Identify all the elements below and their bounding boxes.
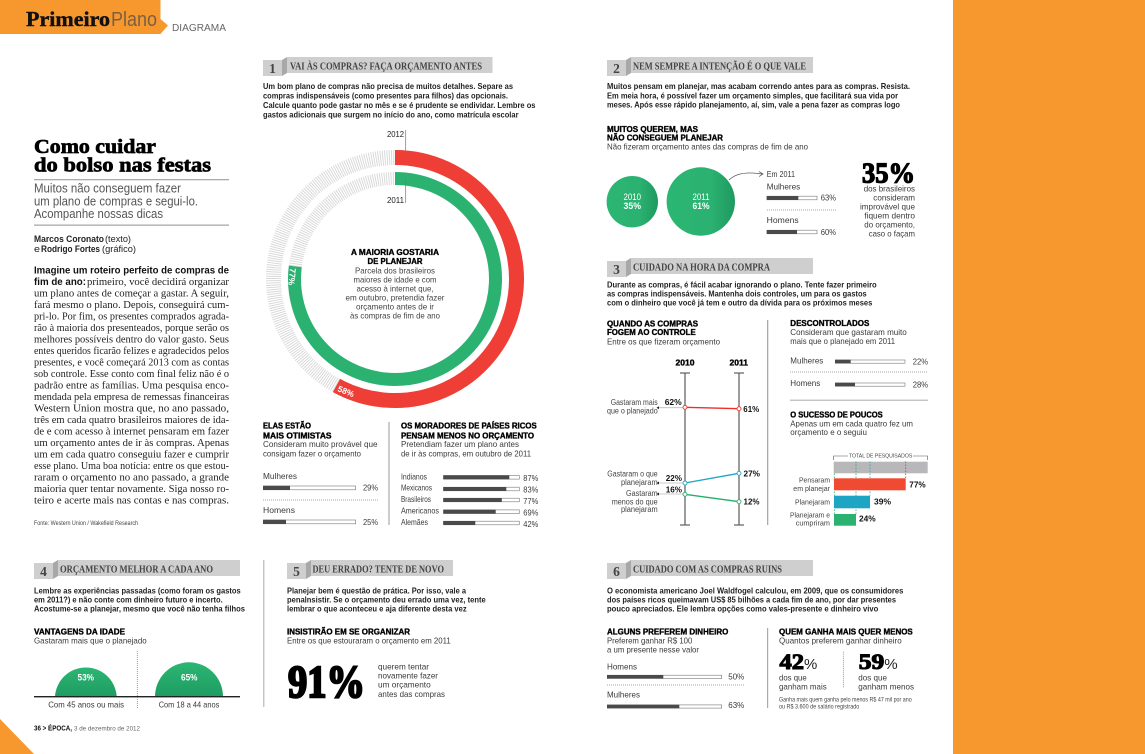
section 3 heading: 3 (613, 262, 620, 277)
chart heading: muitos querem: Não fizeram orçamento antes das compras de fim de ano (607, 141, 808, 151)
panel: descontrolados (790, 319, 928, 390)
body text: primeiro, você decidirá organizar (87, 277, 229, 288)
title: do bolso nas festas (34, 154, 211, 176)
body text (34, 265, 229, 506)
dome 65%: 65% (181, 672, 198, 682)
panel: elas estão mais otimistas: consigam fazer o orçamento (263, 449, 361, 459)
figure 42% (779, 649, 827, 691)
orange side panel (953, 0, 1145, 754)
body text: Imagine um roteiro perfeito de compras de (34, 265, 229, 276)
circle 2010 35% (607, 176, 658, 227)
chart heading: insistirão: Entre os que estouraram o orçamento em 2011 (287, 636, 451, 646)
section 2 text: Em meia hora, é possível fazer um orçamento simples, que facilitará sua vida por (607, 90, 899, 100)
chart heading: quando as compras: Entre os que fizeram orçamento (607, 336, 720, 346)
row labels: planejaram (621, 505, 658, 514)
section 5 heading: DEU ERRADO? TENTE DE NOVO (312, 565, 444, 576)
panel: moradores de países ricos (401, 420, 539, 529)
circle 2010 35%: 35% (624, 201, 641, 211)
body text: fim de ano: (34, 277, 86, 288)
row: mexicanos: Mexicanos (401, 483, 432, 493)
body text: presentes, e você começará 2013 com as contas (34, 357, 229, 368)
row: americanos: 69% (523, 508, 539, 518)
section 3 text: as compras indispensáveis. Mantenha dois controles, um para os gastos (607, 288, 867, 298)
row: indianos: 87% (523, 473, 539, 483)
page header tab (0, 0, 226, 34)
slope chart 2010 to 2011 (607, 359, 760, 525)
bar: planejaram 39% (795, 496, 891, 508)
section 3 heading: CUIDADO NA HORA DA COMPRA (633, 263, 771, 274)
panel: alguns preferem dinheiro (607, 627, 745, 710)
bar: planejaram e cumpriram 24%: Planejaram e (790, 510, 830, 519)
chart heading: vantagens da idade: Gastaram mais que o planejado (34, 636, 147, 646)
label 2011: 2011 (387, 195, 404, 205)
body text: três em cada quatro brasileiros maiores de ida- (34, 415, 229, 426)
panel: elas estão mais otimistas: Mulheres (263, 471, 297, 481)
chart heading: vantagens da idade: VANTAGENS DA IDADE (34, 627, 126, 636)
section 1 text: Um bom plano de compras não precisa de muitos detalhes. Separe as (263, 81, 513, 91)
panel: o sucesso de poucos: O SUCESSO DE POUCOS (790, 410, 883, 419)
section 4 text: Lembre as experiências passadas (como foram os gastos (34, 585, 241, 595)
body text: rão à maioria dos presenteados, porque serão os (34, 323, 229, 334)
figure 59%: 59 (859, 649, 884, 674)
panel: o sucesso de poucos: Apenas um em cada quatro fez um (790, 419, 913, 429)
dome 53% (55, 667, 117, 697)
panel: alguns preferem dinheiro: Mulheres (607, 690, 640, 700)
section 6 text: pouco apreciados. Ele lembra opções como vales-presente e dinheiro vivo (607, 603, 878, 613)
panel: descontrolados: 22% (913, 357, 928, 367)
ring 2011 green arc (295, 178, 496, 379)
bar: planejaram e cumpriram 24%: 24% (859, 514, 876, 524)
panel: moradores de países ricos: Pretendiam fazer um plano antes (401, 439, 519, 449)
section 5 heading (287, 560, 453, 579)
big number 91%: querem tentar (378, 661, 429, 671)
bar: pensaram em planejar 77%: em planejar (793, 484, 830, 493)
subtitle: Muitos não conseguem fazer (34, 180, 182, 196)
figure 59%: dos que (858, 673, 887, 683)
section 2 text (607, 81, 910, 110)
big number 35%: fiquem dentro (864, 210, 915, 220)
big number 91%: 91% (288, 656, 365, 707)
figure 59% (858, 649, 914, 691)
authors (34, 234, 136, 255)
section 2 heading: 2 (613, 61, 620, 76)
authors: (gráfico) (102, 244, 136, 255)
row labels: Gastaram o que (607, 470, 658, 479)
section 4 heading: 4 (40, 564, 47, 579)
authors: (texto) (105, 234, 131, 245)
breakdown 2011 by gender: 60% (821, 227, 836, 237)
panel: descontrolados: Homens (790, 378, 820, 388)
body text: um em cada quatro conseguiu fazer e cumprir (34, 449, 229, 460)
chart heading: insistirão: INSISTIRÃO EM SE ORGANIZAR (287, 626, 410, 636)
section 3 text (607, 279, 877, 307)
rule (34, 224, 229, 226)
row labels: planejaram (621, 478, 658, 487)
big number 91%: antes das compras (378, 689, 445, 699)
section 5 heading: 5 (293, 564, 300, 579)
panel: alguns preferem dinheiro: Homens (607, 661, 637, 671)
section 6 heading: CUIDADO COM AS COMPRAS RUINS (633, 565, 782, 576)
panel: descontrolados: Mulheres (790, 355, 823, 365)
dome 53%: 53% (78, 672, 94, 682)
section 6 heading (607, 560, 813, 579)
panel: alguns preferem dinheiro: Preferem ganhar R$ 100 (607, 636, 693, 646)
big number 35% (860, 158, 915, 238)
bar: pensaram em planejar 77% (793, 475, 926, 493)
section 6 text: dos países ricos queimavam US$ 85 bilhões a cada fim de ano, por dar presentes (607, 594, 896, 604)
panel: moradores de países ricos: PENSAM MENOS NO ORÇAMENTO (401, 431, 535, 440)
ring centre text: orçamento antes de ir (356, 301, 434, 311)
folio (34, 723, 140, 732)
panel: descontrolados: 28% (913, 380, 928, 390)
page header tab: DIAGRAMA (172, 22, 226, 34)
panel: alguns preferem dinheiro: 50% (728, 672, 745, 682)
ring centre text: em outubro, pretendia fazer (346, 292, 445, 302)
section 4 text: em 2011?) e não conte com dinheiro futuro e incerto. (34, 594, 223, 604)
chart heading: quando as compras (607, 320, 720, 346)
section 5 text (287, 585, 486, 613)
panel: elas estão mais otimistas: 25% (363, 517, 378, 527)
title (34, 136, 211, 176)
circle 2011 61% (667, 167, 735, 236)
panel: alguns preferem dinheiro: a um presente nesse valor (607, 645, 699, 655)
section 4 heading (34, 560, 240, 579)
section 4 text (34, 585, 245, 613)
ring chart: planned budget 2012 vs 2011 (273, 129, 516, 400)
ring centre text: acesso à internet que, (356, 283, 434, 293)
arrow from circle to breakdown (729, 172, 763, 180)
section 6 text (607, 585, 904, 613)
section 4 text: Acostume-se a planejar, mesmo que você não tenha filhos (34, 603, 245, 613)
body text: um orçamento antes de ir às compras. Apenas (34, 438, 229, 449)
source note: Fonte: Western Union / Wakefield Research (34, 520, 138, 527)
corner triangle (0, 719, 34, 754)
page header tab: Primeiro (26, 7, 110, 31)
subtitle: um plano de compras e segui-lo. (34, 194, 198, 208)
body text: raram o orçamento no ano passado, a grande (34, 472, 229, 483)
rule (34, 179, 229, 180)
panel: elas estão mais otimistas (263, 420, 378, 527)
section 3 text: Durante as compras, é fácil acabar ignorando o plano. Tente fazer primeiro (607, 279, 877, 289)
figure 42%: % (804, 656, 817, 673)
ring centre text: A MAIORIA GOSTARIA (351, 248, 439, 257)
section 1 heading (263, 57, 492, 76)
section 6 text: O economista americano Joel Waldfogel calculou, em 2009, que os consumidores (607, 585, 904, 595)
line: gastaram mais (683, 405, 741, 411)
slope chart 2010 to 2011: 2011 (730, 359, 748, 368)
body text: um plano antes de começar a gastar. A seguir, (34, 288, 229, 299)
bracket: total de pesquisados: TOTAL DE PESQUISADOS (849, 454, 913, 460)
big number 91% (288, 656, 445, 707)
body text: sob controle. Esse conto com final feliz não é o (34, 369, 229, 380)
body text: entes queridos ficarão felizes e agradecidos pelos (34, 346, 229, 357)
values: 27% (744, 468, 760, 478)
panel: descontrolados: mais que o planejado em 2011 (790, 336, 895, 346)
ring centre text: maiores de idade e com (354, 274, 436, 284)
ring centre text: DE PLANEJAR (368, 257, 423, 266)
ring centre text: Parcela dos brasileiros (355, 265, 435, 275)
body text: mendada pela empresa de remessas financeiras (34, 392, 229, 403)
row: americanos (401, 506, 539, 518)
row: alemães: 42% (523, 519, 539, 529)
panel: elas estão mais otimistas: ELAS ESTÃO (263, 420, 312, 430)
breakdown 2011 by gender: Em 2011 (767, 169, 795, 179)
footnote (779, 698, 912, 710)
authors: e (34, 244, 40, 255)
row labels: Gastaram (626, 489, 658, 498)
big number 35%: improvável que (860, 201, 915, 211)
authors: Marcos Coronato (34, 234, 104, 245)
section 1 text: gastos adicionais que surgem no início do ano, como matrícula escolar (263, 110, 519, 120)
value 77%: 77% (286, 268, 298, 286)
row: americanos: Americanos (401, 506, 439, 516)
row labels (607, 398, 658, 514)
panel: alguns preferem dinheiro: ALGUNS PREFEREM DINHEIRO (607, 627, 729, 636)
bar: planejaram e cumpriram 24%: cumpriram (796, 519, 830, 528)
values: 61% (743, 404, 760, 414)
panel: descontrolados: Consideram que gastaram muito (790, 327, 907, 337)
chart heading: muitos querem (607, 125, 808, 151)
footnote: ou R$ 3.600 de salário registrado (779, 704, 860, 710)
section 5 text: lembrar o que aconteceu e aja diferente desta vez (287, 603, 467, 613)
bar: pensaram em planejar 77%: Pensaram (799, 475, 830, 484)
panel: quem ganha mais quer menos: Quantos preferem ganhar dinheiro (779, 636, 902, 646)
bar: planejaram e cumpriram 24% (790, 510, 876, 528)
row: brasileiros: 77% (523, 496, 539, 506)
section 3 heading (607, 258, 813, 277)
panel: descontrolados: DESCONTROLADOS (790, 319, 870, 328)
section 1 heading: VAI ÀS COMPRAS? FAÇA ORÇAMENTO ANTES (290, 60, 482, 72)
section 6 heading: 6 (613, 564, 620, 579)
bar: mulheres 29% (263, 486, 356, 490)
body text: maioria quer tentar novamente. Siga nosso ro- (34, 484, 229, 495)
values: 16% (666, 485, 682, 495)
row: indianos: Indianos (401, 471, 427, 481)
row: mexicanos (401, 483, 539, 494)
body text: de e com acesso à internet pensaram em fazer (34, 426, 229, 437)
circle 2011 61%: 2011 (692, 192, 710, 202)
chart heading: insistirão (287, 626, 451, 646)
folio: 3 de dezembro de 2012 (74, 725, 140, 732)
ring 2012 red arc (336, 158, 516, 400)
panel: quem ganha mais quer menos (779, 627, 914, 710)
semicircle chart by age (34, 651, 240, 709)
bar: planejaram 39%: Planejaram (795, 498, 830, 507)
panel: alguns preferem dinheiro: 63% (728, 700, 745, 710)
section 1 heading: 1 (269, 61, 276, 76)
breakdown 2011 by gender (767, 169, 836, 237)
section 1 text: Calcule quanto pode gastar no mês e se é prudente se endividar. Lembre os (263, 100, 536, 110)
row: alemães (401, 517, 539, 529)
body text: padrão entre as famílias. Uma pesquisa enco- (34, 380, 229, 391)
breakdown 2011 by gender: Mulheres (767, 181, 800, 191)
folio: 36 > ÉPOCA, (34, 723, 72, 732)
row: mexicanos: 83% (523, 484, 539, 494)
section 2 heading: NEM SEMPRE A INTENÇÃO É O QUE VALE (633, 60, 806, 72)
ring centre text (346, 248, 445, 320)
body text: fará mesmo o plano. Depois, conseguirá cum- (34, 300, 229, 311)
row labels: que o planejado (607, 407, 658, 416)
dome 65% (155, 662, 223, 697)
subtitle (34, 180, 198, 221)
circle 2011 61%: 61% (692, 201, 710, 211)
chart heading: muitos querem: NÃO CONSEGUEM PLANEJAR (607, 133, 723, 143)
big number 35%: consideram (873, 192, 915, 202)
panel: o sucesso de poucos (790, 410, 928, 528)
figure 42%: 42 (780, 649, 804, 674)
big number 35%: caso o façam (869, 228, 915, 238)
line: gastaram menos (683, 492, 741, 504)
bar: homens 25% (263, 520, 356, 524)
section 4 heading: ORÇAMENTO MELHOR A CADA ANO (60, 565, 213, 576)
breakdown 2011 by gender: Homens (767, 215, 799, 225)
panel: elas estão mais otimistas: Consideram muito provável que (263, 439, 378, 449)
values (665, 397, 760, 506)
row labels: menos do que (612, 497, 658, 506)
body text: teiro e acerte mais nas contas e nas compras. (34, 495, 229, 506)
year tick lines (405, 130, 407, 203)
big number 35%: do orçamento, (864, 219, 915, 229)
ring centre text: às compras de fim de ano (350, 310, 440, 320)
chart heading: quando as compras: FOGEM AO CONTROLE (607, 328, 696, 337)
panel: elas estão mais otimistas: MAIS OTIMISTAS (263, 431, 332, 440)
section 2 heading (607, 57, 813, 76)
section 2 text: meses. Após esse rápido planejamento, aí, sim, vale a pena fazer as compras logo (607, 100, 900, 110)
circle 2010 35%: 2010 (624, 192, 641, 202)
row: alemães: Alemães (401, 517, 428, 527)
big number 35%: dos brasileiros (864, 184, 915, 194)
values: 62% (665, 397, 682, 407)
section 5 text: penalnsistir. Se o orçamento deu errado uma vez, tente (287, 594, 486, 604)
footnote: Ganha mais quem ganha pelo menos R$ 47 mil por ano (779, 698, 912, 704)
label 45+: Com 45 anos ou mais (48, 699, 124, 709)
body text: melhores possíveis dentro do valor gasto. Seus (34, 334, 229, 345)
figure 42%: ganham mais (779, 681, 827, 691)
big number 35%: 35% (862, 158, 915, 189)
body text: pri-lo. Por fim, os presentes comprados agrada- (34, 311, 229, 322)
big number 91%: novamente fazer (378, 671, 438, 681)
title: Como cuidar (34, 136, 156, 158)
slope chart 2010 to 2011: 2010 (676, 359, 695, 368)
bar: pensaram em planejar 77%: 77% (909, 479, 926, 489)
chart heading: muitos querem: MUITOS QUEREM, MAS (607, 125, 699, 134)
body text: Western Union mostra que, no ano passado, (34, 403, 229, 414)
figure 42%: dos que (779, 673, 807, 683)
panel: elas estão mais otimistas: Homens (263, 505, 295, 515)
label 2012: 2012 (387, 129, 404, 139)
panel: quem ganha mais quer menos: QUEM GANHA MAIS QUER MENOS (779, 627, 913, 636)
row: indianos (401, 471, 539, 483)
section 2 text: Muitos pensam em planejar, mas acabam correndo antes para as compras. Resista. (607, 81, 910, 91)
body text: esse plano. Uma boa notícia: entre os que estou- (34, 461, 229, 472)
section 1 text (263, 81, 536, 120)
panel: o sucesso de poucos: orçamento e o seguiu (790, 427, 867, 437)
chart heading: quando as compras: QUANDO AS COMPRAS (607, 320, 699, 329)
label 18-44: Com 18 a 44 anos (159, 699, 219, 709)
authors: Rodrigo Fortes (41, 244, 100, 255)
line: gastaram o que planejaram (683, 471, 741, 485)
figure 59%: % (884, 656, 898, 673)
section 5 text: Planejar bem é questão de prática. Por isso, vale a (287, 585, 466, 595)
values: 22% (666, 473, 682, 483)
page header tab: Plano (111, 9, 157, 31)
bar: planejaram 39%: 39% (874, 497, 891, 507)
value 58%: 58% (336, 384, 356, 399)
big number 91%: um orçamento (378, 680, 431, 690)
values: 12% (744, 496, 760, 506)
figure 59%: ganham menos (858, 681, 914, 691)
panel: moradores de países ricos: de ir às compras, em outubro de 2011 (401, 449, 531, 459)
subtitle: Acompanhe nossas dicas (34, 206, 163, 221)
panel: elas estão mais otimistas: 29% (363, 483, 378, 493)
panel: moradores de países ricos: OS MORADORES DE PAÍSES RICOS (401, 420, 537, 430)
breakdown 2011 by gender: 63% (821, 193, 836, 203)
row: brasileiros (401, 494, 539, 506)
section 3 text: com o dinheiro que você já tem e outro da dívida para os próximos meses (607, 297, 873, 307)
row: brasileiros: Brasileiros (401, 494, 431, 504)
row labels: Gastaram mais (611, 398, 658, 407)
section 1 text: compras indispensáveis (como presentes para filhos) das opcionais. (263, 90, 508, 100)
chart heading: vantagens da idade (34, 627, 147, 646)
